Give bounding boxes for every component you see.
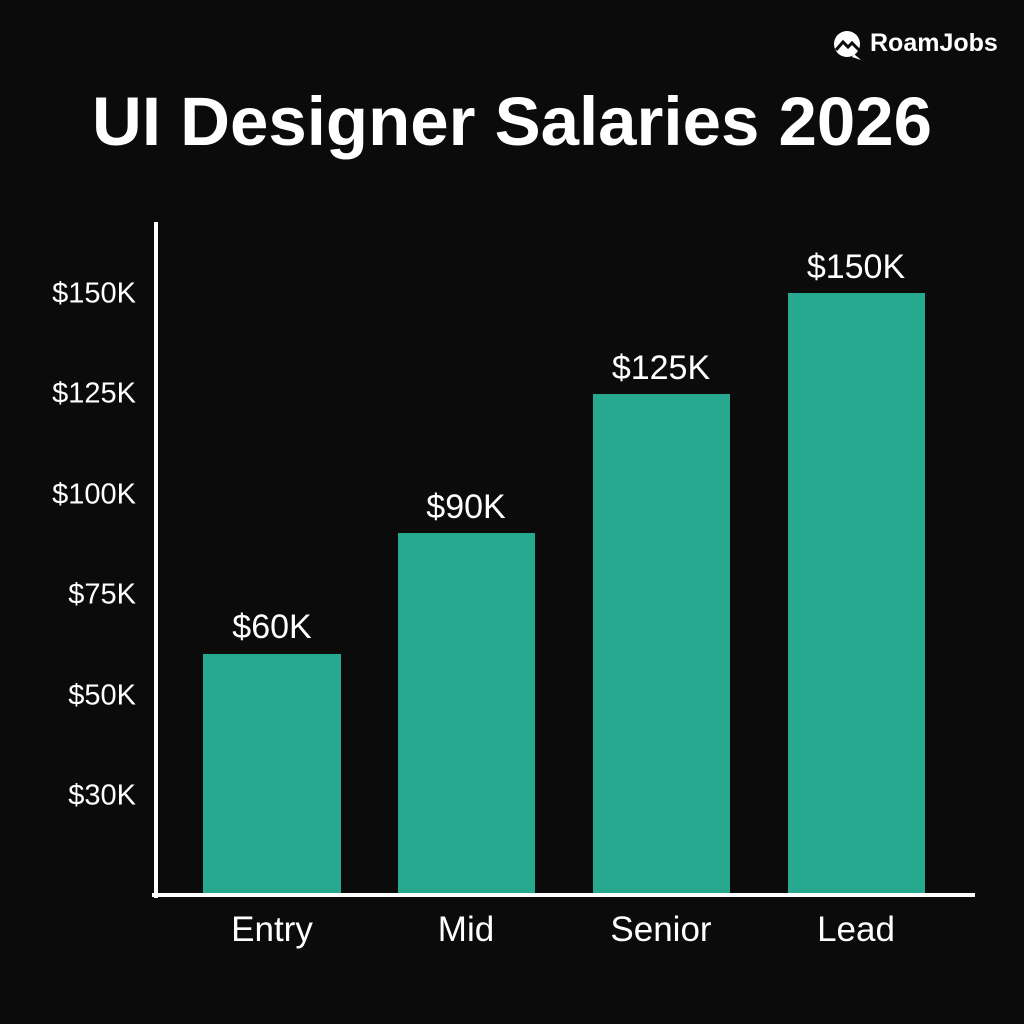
value labels: $150K	[807, 248, 905, 286]
x-axis labels: Entry	[231, 910, 313, 949]
y-axis labels: $100K	[52, 478, 136, 510]
y-axis labels: $125K	[52, 378, 136, 410]
value labels	[232, 248, 905, 646]
y-axis labels: $50K	[68, 680, 136, 712]
x-axis labels: Senior	[610, 910, 712, 949]
x-axis labels	[231, 910, 895, 949]
bar: Lead	[788, 293, 925, 893]
y-axis labels: $30K	[68, 780, 136, 812]
title: UI Designer Salaries 2026	[92, 83, 932, 160]
logo	[834, 29, 998, 60]
y-axis labels: $150K	[52, 278, 136, 310]
logo text: RoamJobs	[870, 29, 998, 57]
value labels: $125K	[612, 349, 710, 387]
x-axis labels: Lead	[817, 910, 895, 949]
bar: Entry	[203, 654, 341, 893]
value labels: $60K	[232, 608, 312, 646]
bar: Senior	[593, 394, 730, 893]
chart	[152, 222, 975, 898]
value labels: $90K	[426, 488, 506, 526]
y-axis labels: $75K	[68, 578, 136, 610]
bar: Mid	[398, 533, 535, 893]
axes	[154, 222, 158, 898]
y-axis labels	[52, 278, 136, 812]
x-axis labels: Mid	[438, 910, 494, 949]
icon: logo mark	[834, 31, 861, 60]
